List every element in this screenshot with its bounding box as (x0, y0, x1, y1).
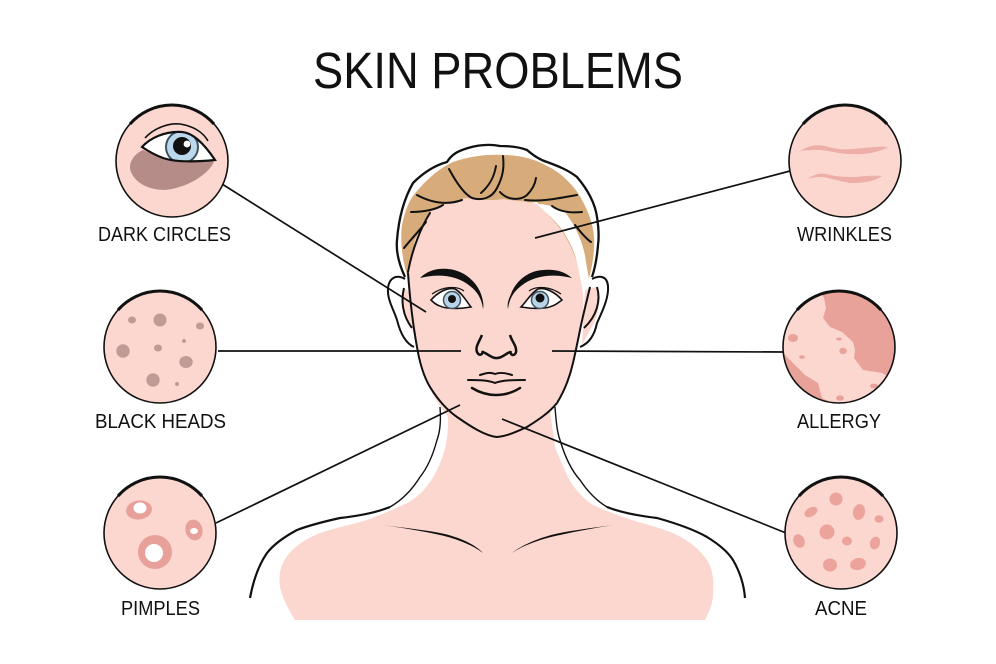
panel: pimples (104, 477, 216, 620)
panel: allergy (782, 290, 896, 428)
title: SKIN PROBLEMS (313, 42, 683, 99)
label: WRINKLES (797, 224, 892, 246)
panel: acne (785, 477, 897, 620)
eyebrows (420, 269, 572, 309)
label: BLACK HEADS (95, 411, 226, 433)
face outline (408, 273, 590, 437)
panel: black heads (95, 291, 226, 433)
panel: dark circles (98, 105, 231, 246)
ears (403, 288, 418, 345)
illustration: woman's head and shoulders (250, 145, 745, 620)
panel: wrinkles (789, 105, 901, 246)
pointer lines (216, 171, 790, 533)
body skin (279, 410, 713, 620)
left ear (388, 277, 414, 347)
lips (468, 373, 525, 395)
label: ACNE (815, 598, 867, 620)
right ear (580, 277, 608, 347)
collarbones (383, 525, 613, 553)
left eye (431, 287, 471, 308)
face skin (408, 198, 583, 450)
nose (476, 335, 516, 358)
wrinkle marks (800, 145, 888, 154)
hair strands (404, 156, 591, 272)
icon: eye (142, 124, 215, 163)
right eye (521, 287, 562, 308)
rash patches (784, 292, 894, 402)
hair (401, 155, 594, 282)
neck and shoulder outlines (250, 407, 745, 598)
label: ALLERGY (797, 411, 881, 433)
head outline (397, 145, 599, 277)
spots (116, 314, 204, 387)
label: DARK CIRCLES (98, 224, 231, 246)
label: PIMPLES (121, 598, 200, 620)
spots (791, 492, 884, 572)
spots (125, 499, 205, 569)
icon: dark patch under eye (130, 150, 214, 190)
